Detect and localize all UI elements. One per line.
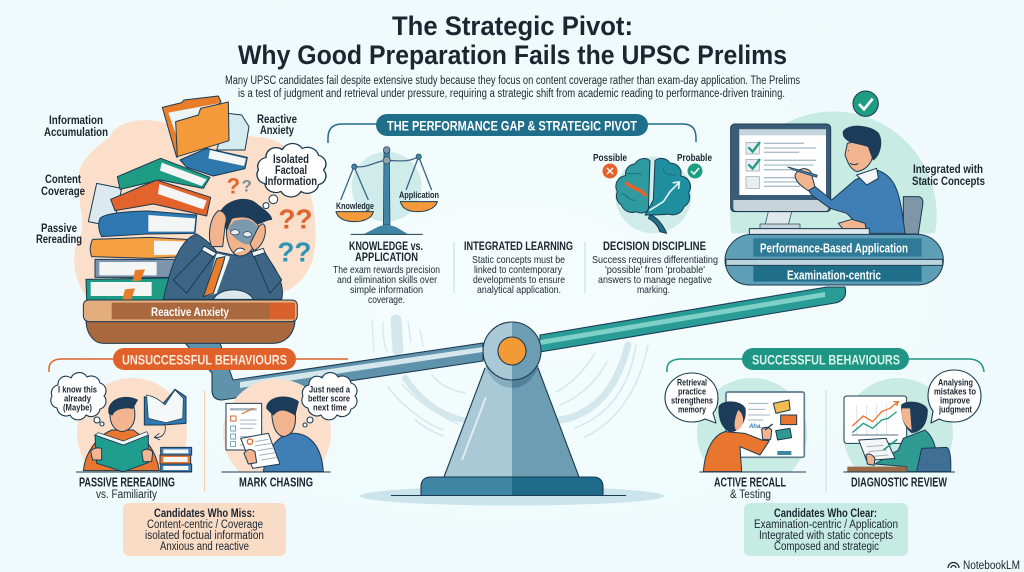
- question marks: ??: [277, 237, 312, 268]
- hand: [866, 454, 875, 465]
- panel: left labels: Passive: [41, 223, 77, 235]
- label: mark chasing: MARK CHASING: [239, 476, 313, 490]
- green book: [117, 158, 210, 189]
- left hand: [209, 211, 226, 247]
- panel: left labels: [36, 114, 297, 246]
- panel: performance gap and strategic pivot: [328, 114, 718, 306]
- speech bubble: retrieval practice: strengthens: [671, 396, 713, 406]
- blue book top: [180, 148, 247, 176]
- red-orange book: [111, 180, 211, 216]
- fulcrum triangle: [444, 366, 579, 477]
- right hand: [250, 224, 265, 251]
- person at monitor: [787, 126, 905, 233]
- icon: check badge: [853, 91, 878, 116]
- thought cloud: just need a better score: [302, 373, 357, 427]
- anxious man: [163, 199, 282, 299]
- callout: candidates who miss: Content-centric / Coverage: [147, 519, 263, 531]
- reader head: [110, 407, 135, 432]
- thought cloud: just need a better score: better score: [308, 394, 350, 404]
- green book bottom: [86, 278, 170, 300]
- label: passive rereading: PASSIVE REREADING: [79, 476, 175, 490]
- whiteboard: Aha...: [748, 424, 766, 430]
- speech bubble: retrieval practice: memory: [678, 404, 707, 416]
- panel: left overwhelmed candidate illustration: [74, 96, 316, 302]
- panel: unsuccessful behaviours: [49, 348, 357, 556]
- panel: left labels: Information: [49, 115, 103, 127]
- possible label: Possible: [593, 152, 627, 164]
- section heading: SUCCESSFUL BEHAVIOURS: [752, 352, 900, 368]
- label: passive rereading: vs. Familiarity: [96, 489, 157, 501]
- platform text: Performance-Based Application: [760, 242, 908, 256]
- hair: [843, 126, 881, 160]
- icon: paper behind folder: [217, 113, 249, 150]
- open teal book: [95, 435, 148, 472]
- collar: [857, 168, 878, 185]
- hands: [91, 448, 153, 462]
- panel heading: [376, 114, 648, 136]
- section heading: [742, 348, 909, 370]
- illustration: mark chasing: [222, 379, 331, 472]
- title: Why Good Preparation Fails the UPSC Prelims: [238, 40, 787, 70]
- question marks: ?: [227, 173, 240, 198]
- head: [226, 215, 258, 256]
- text block: knowledge vs application: [333, 241, 440, 306]
- open book on desk: [213, 290, 253, 299]
- monitor: [731, 124, 831, 229]
- bracket line: [667, 359, 984, 372]
- glasses and face: [233, 248, 245, 253]
- callout: candidates who clear: Examination-centric / Application: [754, 519, 898, 531]
- section heading: UNSUCCESSFUL BEHAVIOURS: [122, 352, 287, 368]
- pivot hub: [483, 322, 541, 380]
- scale labels: Knowledge: [336, 201, 374, 211]
- left beam arm: [185, 343, 483, 400]
- icon: red cross: [602, 164, 618, 178]
- text block: integrated learning: INTEGRATED LEARNING: [464, 241, 573, 253]
- panel: successful behaviours: [665, 348, 984, 556]
- text block: integrated learning: developments to ensure: [473, 274, 565, 286]
- icon: orange folder: [162, 96, 229, 157]
- callout: isolated factual information cloud: [257, 144, 326, 197]
- platform text: Examination-centric: [787, 268, 881, 282]
- label: active recall: & Testing: [730, 489, 771, 501]
- head: [845, 137, 874, 172]
- label: active recall: [714, 476, 786, 501]
- seesaw beam: [185, 287, 846, 400]
- text block: decision discipline: DECISION DISCIPLINE: [603, 241, 706, 253]
- speech bubble: analysing mistakes: improve: [940, 396, 970, 406]
- speech bubble: retrieval practice: Retrieval: [677, 378, 707, 388]
- callout: candidates who clear: Integrated with static concepts: [759, 530, 893, 542]
- hair: [267, 397, 298, 415]
- intro text: is a test of judgment and retrieval under pressure, requiring a strategic shift from academic reading to performance-driven training.: [238, 88, 785, 100]
- platform text: [760, 242, 908, 282]
- bracket line: [328, 124, 696, 143]
- teal circle: [730, 112, 937, 233]
- seesaw fulcrum motion arcs: [372, 320, 648, 437]
- icon: loose sheet: [88, 183, 122, 227]
- chair: [917, 447, 951, 472]
- sweater: [808, 170, 905, 233]
- speech bubble: retrieval practice: practice: [678, 386, 706, 398]
- blue book: [99, 211, 197, 237]
- thought cloud: I know this already: (Maybe): [63, 402, 92, 414]
- icon: brain with check and cross: [615, 157, 692, 233]
- section heading: [113, 348, 296, 370]
- reader body: [83, 430, 159, 471]
- question marks: ??: [278, 203, 313, 234]
- teal sweater: [875, 430, 937, 472]
- intro text: [225, 75, 800, 100]
- text block: decision discipline: 'possible' from 'probable': [605, 264, 705, 276]
- panel: left labels: Reactive: [257, 114, 297, 126]
- panel heading: THE PERFORMANCE GAP & STRATEGIC PIVOT: [387, 118, 637, 134]
- shirt and tie: [204, 253, 230, 297]
- peach blob: [74, 120, 316, 297]
- small book stack: [160, 447, 192, 472]
- thought cloud: just need a better score: next time: [313, 402, 347, 414]
- right beam arm: [540, 287, 846, 352]
- label: passive rereading: [79, 476, 175, 501]
- text block: decision discipline: Success requires differentiating: [592, 254, 718, 266]
- desk label: Reactive Anxiety: [151, 305, 229, 319]
- callout: candidates who miss: [123, 503, 286, 556]
- panel: left labels: Anxiety: [260, 125, 294, 137]
- icon: balance scale: [336, 147, 437, 234]
- label: integrated with static concepts: Static Concepts: [912, 176, 985, 188]
- head: [272, 410, 296, 437]
- label: active recall: ACTIVE RECALL: [714, 476, 786, 490]
- reader hair: [109, 397, 137, 415]
- mark sheet: [226, 403, 262, 450]
- title: [238, 11, 787, 70]
- hand with pen: [762, 427, 772, 439]
- text block: knowledge vs application: The exam rewards precision: [333, 264, 440, 276]
- panel: left labels: Accumulation: [44, 127, 108, 139]
- white book: [95, 259, 175, 277]
- hair: [221, 199, 272, 230]
- thought cloud: I know this already: [51, 373, 106, 426]
- callout: candidates who clear: [744, 503, 908, 556]
- callout: isolated factual information cloud: Information: [265, 174, 317, 188]
- text block: integrated learning: Static concepts must be: [472, 254, 565, 266]
- text block: knowledge vs application: KNOWLEDGE vs.: [349, 241, 423, 253]
- suit: [163, 234, 282, 299]
- platform: [725, 234, 943, 285]
- callout: candidates who miss: isolated foctual information: [145, 530, 264, 542]
- speech bubble: analysing mistakes: [928, 370, 981, 423]
- text block: knowledge vs application: coverage.: [368, 294, 405, 306]
- sweater: [263, 433, 323, 472]
- speech bubble: analysing mistakes: mistakes to: [934, 386, 976, 398]
- seesaw fulcrum: [360, 322, 664, 506]
- text block: decision discipline: [592, 241, 718, 296]
- label: diagnostic review: DIAGNOSTIC REVIEW: [851, 476, 947, 490]
- probable label: Probable: [677, 152, 712, 164]
- text block: integrated learning: analytical application.: [477, 284, 561, 296]
- keyboard on desk: [749, 229, 869, 235]
- orange book: [90, 237, 187, 258]
- label: integrated with static concepts: [912, 164, 985, 188]
- illustration: passive rereading: [76, 378, 192, 472]
- icon: green check: [688, 164, 702, 178]
- floating open book: [144, 389, 186, 425]
- callout: isolated factual information cloud: Factoal: [275, 163, 307, 177]
- illustration: active recall: [697, 378, 807, 472]
- callout: candidates who miss: Candidates Who Miss:: [154, 508, 255, 520]
- orange shirt: [703, 432, 769, 472]
- thought cloud: I know this already: I know this: [58, 384, 97, 396]
- speech bubble: analysing mistakes: judgment: [938, 404, 973, 416]
- panel: left labels: Rereading: [36, 234, 82, 246]
- text block: integrated learning: [464, 241, 573, 296]
- text block: integrated learning: linked to contemporary: [474, 264, 563, 276]
- book stack: [86, 148, 247, 302]
- head: [902, 402, 927, 433]
- panel: left labels: Coverage: [41, 186, 85, 198]
- bookmarks: [122, 269, 145, 302]
- panel: left desk: [83, 300, 297, 343]
- cuffs: [202, 246, 265, 257]
- panel: right confident candidate illustration: [725, 91, 943, 285]
- intro text: Many UPSC candidates fail despite extensive study because they focus on content coverage rather than exam-day application. The Prelims: [225, 75, 800, 87]
- callout: isolated factual information cloud: Isolated: [273, 152, 309, 166]
- head: [719, 402, 745, 432]
- monitor with chart: [844, 396, 907, 443]
- bracket line: [49, 359, 348, 372]
- text block: knowledge vs application: and elimination skills over: [337, 274, 437, 286]
- callout: candidates who clear: Candidates Who Clear:: [774, 508, 877, 520]
- speech bubble: analysing mistakes: Analysing: [938, 378, 973, 388]
- text block: decision discipline: marking.: [637, 284, 670, 296]
- callout: candidates who clear: Composed and strategic: [774, 541, 879, 553]
- illustration: diagnostic review: [843, 378, 955, 472]
- question marks: [227, 173, 313, 268]
- thought cloud: just need a better score: Just need a: [309, 384, 351, 396]
- answer sheet: [241, 433, 280, 468]
- arrow to reader: [154, 425, 165, 440]
- left sleeve: [173, 248, 213, 293]
- paper and pen: [859, 438, 895, 461]
- hand with pen: [795, 169, 815, 191]
- title: The Strategic Pivot:: [392, 11, 633, 41]
- hand: [244, 450, 257, 464]
- callout: candidates who miss: Anxious and reactive: [160, 541, 249, 553]
- question marks: ?: [242, 177, 252, 196]
- text block: knowledge vs application: simple information: [350, 284, 423, 296]
- hand on keyboard: [838, 219, 867, 232]
- label: integrated with static concepts: Integrated with: [913, 164, 983, 176]
- thought cloud: I know this already: already: [64, 394, 92, 404]
- fulcrum base: [391, 477, 626, 496]
- panel: left labels: Content: [45, 174, 81, 186]
- text block: knowledge vs application: APPLICATION: [355, 252, 418, 264]
- chair: [903, 197, 923, 234]
- text block: decision discipline: answers to manage negative: [598, 274, 712, 286]
- scale label application: Application: [399, 190, 439, 200]
- thought bubbles: [263, 195, 278, 209]
- speech bubble: retrieval practice: [665, 373, 718, 423]
- right sleeve: [254, 253, 282, 293]
